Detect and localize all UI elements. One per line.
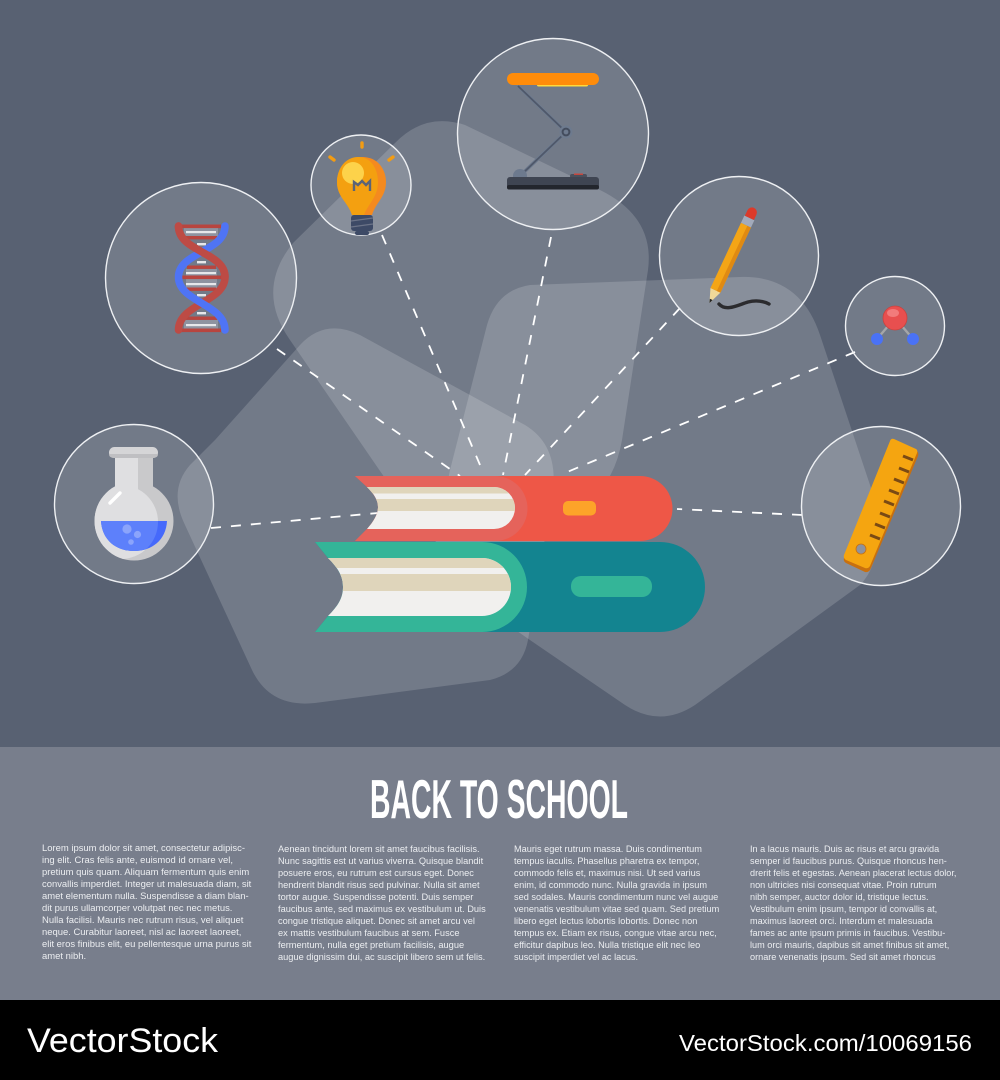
text column 4: fames ac ante ipsum primis in faucibus. Vestibu- bbox=[750, 928, 945, 938]
text column 1: dit purus ullamcorper volutpat nec nec metus. bbox=[42, 903, 232, 914]
text column 2: fermentum, nulla eget pretium facilisis, augue bbox=[278, 940, 464, 950]
title: BACK TO SCHOOL bbox=[370, 768, 628, 830]
text column 4: semper id faucibus purus. Quisque rhoncus hen- bbox=[750, 856, 947, 866]
text column 2: faucibus ante, sed maximus ex vestibulum ut. Duis bbox=[278, 904, 486, 914]
icon: flask bbox=[94, 447, 174, 560]
text column 4: ornare venenatis ipsum. Sed sit amet rhoncus bbox=[750, 952, 936, 962]
text column 4: drerit felis et egestas. Aenean placerat lectus dolor, bbox=[750, 868, 956, 878]
text column 2: tortor augue. Suspendisse potenti. Duis semper bbox=[278, 892, 473, 902]
circle: flask bbox=[54, 424, 214, 584]
icon: light bulb bbox=[330, 143, 393, 235]
circle: desk lamp bbox=[458, 38, 648, 230]
circle: molecule bbox=[846, 276, 944, 376]
text column 2: Nunc sagittis est ut varius viverra. Quisque blandit bbox=[278, 856, 483, 866]
text column 3: venenatis vestibulum vitae sed quam. Sed pretium bbox=[514, 904, 719, 914]
text column 3 bbox=[514, 844, 719, 962]
footer url: VectorStock.com/10069156 bbox=[679, 1030, 972, 1056]
text column 1 bbox=[42, 843, 252, 962]
bottom band bbox=[0, 747, 1000, 1000]
text column 3: efficitur dapibus leo. Nulla tristique elit nec leo bbox=[514, 940, 700, 950]
book: red bbox=[355, 476, 672, 541]
text column 3: libero eget lectus lobortis lobortis. Donec non bbox=[514, 916, 697, 926]
dashed connector lines bbox=[211, 235, 855, 528]
icon: desk lamp bbox=[507, 73, 599, 190]
book: teal bbox=[315, 542, 705, 632]
text column 2: hendrerit blandit risus sed pulvinar. Nulla sit amet bbox=[278, 880, 480, 890]
circle: DNA bbox=[106, 182, 296, 374]
footer logo: VectorStock bbox=[27, 1022, 219, 1060]
label: red book bbox=[563, 501, 596, 516]
text column 3: commodo felis et, maximus nisi. Ut sed varius bbox=[514, 868, 700, 878]
icon: DNA helix bbox=[178, 224, 225, 332]
icon: pencil bbox=[705, 206, 759, 305]
text column 2: posuere eros, eu rutrum est cursus eget. Donec bbox=[278, 868, 474, 878]
text column 4: In a lacus mauris. Duis ac risus et arcu gravida bbox=[750, 844, 939, 854]
book stack bbox=[315, 476, 705, 632]
text column 2: augue dignissim dui, ac suscipit libero sem ut felis. bbox=[278, 952, 485, 962]
text column 4: Vestibulum enim ipsum, tempor id convallis at, bbox=[750, 904, 937, 914]
icon: ruler bbox=[844, 439, 918, 572]
text column 3: Mauris eget rutrum massa. Duis condimentum bbox=[514, 844, 702, 854]
text column 4: maximus laoreet orci. Interdum et malesuada bbox=[750, 916, 933, 926]
text column 1: ing elit. Cras felis ante, euismod id ornare vel, bbox=[42, 855, 233, 866]
label: teal book bbox=[571, 576, 652, 597]
circle: ruler bbox=[802, 426, 960, 586]
text column 4: nibh semper, auctor dolor id, tristique lectus. bbox=[750, 892, 929, 902]
footer bar bbox=[0, 1000, 1000, 1080]
text column 3: suscipit imperdiet vel ac lacus. bbox=[514, 952, 638, 962]
text column 1: neque. Curabitur laoreet, nisl ac laoreet laoreet, bbox=[42, 927, 241, 938]
text column 4 bbox=[750, 844, 956, 962]
text column 2 bbox=[278, 844, 486, 962]
text column 1: Nulla facilisi. Mauris nec rutrum risus, vel aliquet bbox=[42, 915, 243, 926]
text column 3: tempus ex. Etiam ex risus, congue vitae arcu nec, bbox=[514, 928, 717, 938]
background shapes bbox=[178, 121, 878, 717]
text column 1: convallis imperdiet. Integer ut malesuada diam, sit bbox=[42, 879, 251, 890]
circle: light bulb bbox=[311, 135, 411, 235]
text column 1: amet elementum nulla. Suspendisse a diam blan- bbox=[42, 891, 249, 902]
circle: pencil bbox=[660, 176, 818, 336]
text column 1: amet nibh. bbox=[42, 951, 86, 962]
text column 1: elit eros finibus elit, eu pellentesque urna purus sit bbox=[42, 939, 251, 950]
text column 1: Lorem ipsum dolor sit amet, consectetur adipisc- bbox=[42, 843, 245, 854]
text column 2: ex mattis vestibulum faucibus at sem. Fusce bbox=[278, 928, 459, 938]
text column 4: non ultricies nisi consequat vitae. Proin rutrum bbox=[750, 880, 937, 890]
text column 2: congue tristique aliquet. Donec sit amet arcu vel bbox=[278, 916, 475, 926]
text column 1: pretium quis quam. Aliquam fermentum quis enim bbox=[42, 867, 249, 878]
text column 4: lum orci mauris, dapibus sit amet finibus sit amet, bbox=[750, 940, 949, 950]
text column 3: sed sodales. Mauris condimentum nunc vel augue bbox=[514, 892, 718, 902]
pencil stroke bbox=[719, 301, 769, 308]
text column 2: Aenean tincidunt lorem sit amet faucibus facilisis. bbox=[278, 844, 480, 854]
icon: molecule bbox=[871, 306, 919, 345]
text column 3: enim, id commodo nunc. Nulla gravida in ipsum bbox=[514, 880, 707, 890]
text column 3: tempus iaculis. Phasellus pharetra ex tempor, bbox=[514, 856, 699, 866]
